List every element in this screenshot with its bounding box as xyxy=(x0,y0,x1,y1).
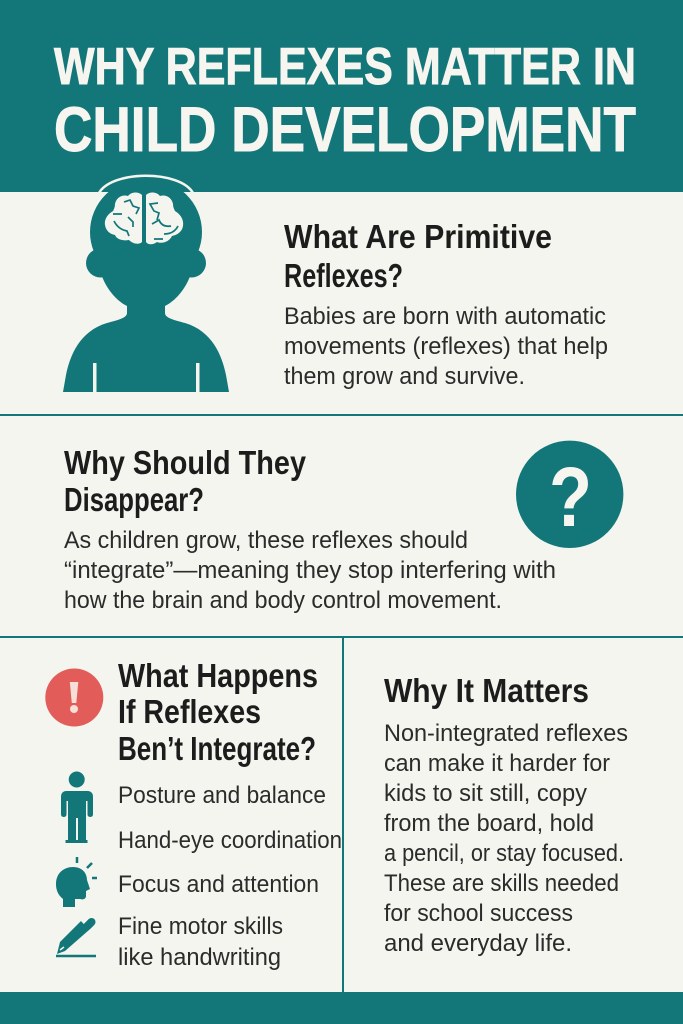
heading: what are primitive reflexes: Reflexes? xyxy=(284,257,403,294)
text: why it matters body xyxy=(384,720,628,957)
panel: what happens if reflexes don't integrate xyxy=(45,657,342,971)
panel: what are primitive reflexes xyxy=(63,176,608,392)
icon: child with brain xyxy=(63,176,229,392)
header band with title xyxy=(0,0,683,192)
text: why it matters body: and everyday life. xyxy=(384,930,572,957)
text: primitive reflexes description: Babies are born with automatic xyxy=(284,303,606,330)
text: why it matters body: kids to sit still, copy xyxy=(384,780,587,807)
heading: what are primitive reflexes xyxy=(284,218,552,294)
text: hand-eye coordination: Hand-eye coordination xyxy=(118,827,342,854)
text: primitive reflexes description xyxy=(284,303,608,390)
heading: what happens: Ben’t Integrate? xyxy=(118,730,316,767)
text: integration description: As children grow, these reflexes should xyxy=(64,527,468,554)
text: integration description: “integrate”—meaning they stop interfering with xyxy=(64,557,556,584)
text: fine motor skills: like handwriting xyxy=(118,944,281,971)
panel: why it matters xyxy=(384,672,628,957)
text: primitive reflexes description: them grow and survive. xyxy=(284,363,525,390)
icon: question mark xyxy=(516,441,623,548)
text: primitive reflexes description: movements (reflexes) that help xyxy=(284,333,608,360)
text: why it matters body: for school success xyxy=(384,900,573,927)
icon: brain xyxy=(105,192,183,244)
text: integration description: how the brain and body control movement. xyxy=(64,587,502,614)
text: why it matters body: Non-integrated reflexes xyxy=(384,720,628,747)
text: focus and attention: Focus and attention xyxy=(118,871,319,898)
text: why it matters body: These are skills needed xyxy=(384,870,619,897)
heading: what are primitive reflexes: What Are Primitive xyxy=(284,218,552,255)
icon: head with focus rays xyxy=(56,857,97,907)
heading: what happens: What Happens xyxy=(118,657,318,694)
heading: what happens xyxy=(118,657,318,767)
icon: pencil xyxy=(56,921,96,956)
heading: why should they disappear xyxy=(64,444,307,518)
title xyxy=(54,38,636,165)
text: why it matters body: can make it harder for xyxy=(384,750,610,777)
heading: what happens: If Reflexes xyxy=(118,693,261,730)
footer band xyxy=(0,992,683,1024)
icon: question mark: ? xyxy=(549,450,592,544)
text: fine motor skills xyxy=(118,913,283,971)
text: posture and balance: Posture and balance xyxy=(118,782,326,809)
text: fine motor skills: Fine motor skills xyxy=(118,913,283,940)
heading: why it matters: Why It Matters xyxy=(384,672,589,709)
panel: why should they disappear xyxy=(64,441,623,614)
icon: standing person xyxy=(61,772,93,843)
icon: red alert xyxy=(45,668,103,726)
heading: why should they disappear: Why Should They xyxy=(64,444,307,481)
text: why it matters body: from the board, hold xyxy=(384,810,594,837)
heading: why should they disappear: Disappear? xyxy=(64,481,204,518)
text: integration description xyxy=(64,527,556,614)
text: why it matters body: a pencil, or stay focused. xyxy=(384,840,624,867)
